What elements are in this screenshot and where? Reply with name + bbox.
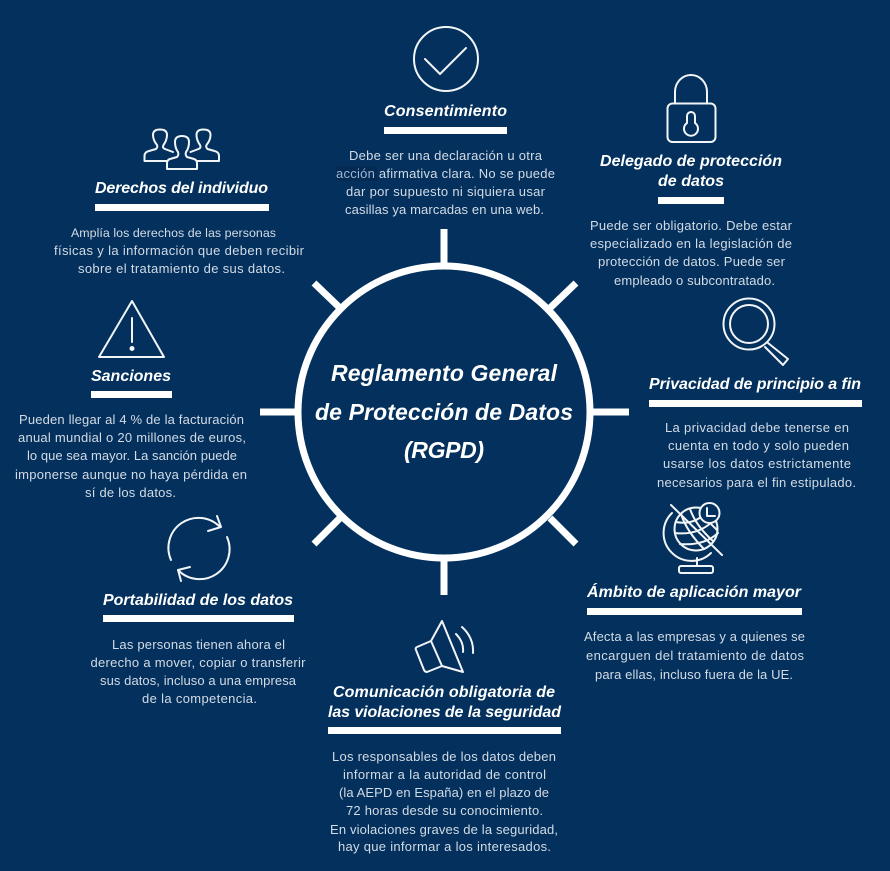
heading bar: consentimiento: [384, 127, 507, 134]
heading: consentimiento: Consentimiento: [384, 103, 507, 120]
text: privacidad: usarse los datos estrictamente: [663, 456, 851, 471]
heading: delegado: Delegado de protección: [600, 153, 782, 170]
heading bar: delegado: [658, 197, 724, 204]
text: sanciones: anual mundial o 20 millones de euros,: [18, 430, 246, 445]
text: delegado: empleado o subcontratado.: [614, 273, 775, 288]
icon: warning triangle: [99, 301, 164, 357]
heading: comunicación: las violaciones de la seguridad: [328, 704, 562, 721]
central title: de Protección de Datos: [315, 399, 573, 425]
text: comunicación: [330, 749, 558, 854]
text: privacidad: necesarios para el fin estipulado.: [657, 475, 856, 490]
icon: check circle: [414, 27, 478, 91]
text: sanciones: Pueden llegar al 4 % de la facturación: [19, 412, 244, 427]
text: ámbito: encarguen del tratamiento de datos: [586, 648, 804, 663]
text: portabilidad: de la competencia.: [142, 691, 257, 706]
text: consentimiento: [336, 148, 555, 217]
text: consentimiento: casillas ya marcadas en una web.: [345, 202, 544, 217]
heading: comunicación: [328, 684, 562, 721]
heading: privacidad: Privacidad de principio a fin: [649, 376, 861, 393]
heading: delegado: [600, 153, 782, 190]
heading: ámbito: Ámbito de aplicación mayor: [586, 582, 802, 601]
heading bar: comunicación: [328, 727, 561, 734]
panel: delegado de protección de datos: [590, 75, 793, 288]
text: privacidad: cuenta en todo y solo pueden: [668, 438, 849, 453]
heading bar: derechos: [95, 204, 269, 211]
panel: comunicación obligatoria: [328, 621, 562, 854]
heading: portabilidad: Portabilidad de los datos: [103, 592, 293, 609]
text: ámbito: [584, 629, 805, 682]
text: derechos: Amplía los derechos de las personas: [71, 226, 276, 240]
text: portabilidad: Las personas tienen ahora el: [112, 637, 285, 652]
panel: portabilidad de los datos: [90, 516, 306, 706]
panel: privacidad de principio a fin: [649, 298, 862, 490]
panel: consentimiento: [336, 27, 555, 217]
panel: ámbito de aplicación mayor: [584, 503, 805, 682]
central wheel with spokes: [260, 229, 629, 595]
text: delegado: protección de datos. Puede ser: [598, 254, 786, 269]
text: derechos: [54, 226, 305, 276]
text: comunicación: hay que informar a los interesados.: [338, 839, 551, 854]
text: consentimiento: acción afirmativa clara. No se puede: [336, 166, 555, 181]
text: privacidad: La privacidad debe tenerse en: [665, 420, 849, 435]
text: sanciones: sí de los datos.: [85, 485, 176, 500]
text: portabilidad: [90, 637, 306, 706]
text: comunicación: En violaciones graves de la seguridad,: [330, 822, 558, 837]
heading bar: ámbito: [587, 608, 802, 615]
heading bar: privacidad: [649, 400, 862, 407]
central title: Reglamento General: [331, 360, 558, 386]
heading bar: sanciones: [91, 391, 172, 398]
text: sanciones: lo que sea mayor. La sanción puede: [27, 448, 237, 463]
icon: circular arrows: [168, 516, 230, 581]
text: comunicación: (la AEPD en España) en el plazo de: [339, 785, 549, 800]
heading: derechos: Derechos del individuo: [95, 180, 268, 197]
text: derechos: sobre el tratamiento de sus datos.: [78, 261, 285, 276]
text: delegado: Puede ser obligatorio. Debe estar: [590, 218, 793, 233]
heading: comunicación: Comunicación obligatoria de: [333, 684, 555, 701]
panel: sanciones: [15, 301, 247, 500]
text: portabilidad: sus datos, incluso a una empresa: [100, 673, 297, 688]
icon: magnifying glass: [724, 298, 788, 365]
heading: delegado: de datos: [658, 173, 724, 190]
panel: derechos del individuo: [54, 130, 305, 276]
text: comunicación: informar a la autoridad de control: [343, 767, 546, 782]
icon: padlock: [668, 75, 716, 142]
heading: sanciones: Sanciones: [91, 368, 171, 385]
text: delegado: [590, 218, 793, 288]
text: consentimiento: dar por supuesto ni siquiera usar: [346, 184, 546, 199]
text: comunicación: Los responsables de los datos deben: [332, 749, 556, 764]
text: sanciones: [15, 412, 247, 500]
text: ámbito: Afecta a las empresas y a quienes se: [584, 629, 805, 644]
text: ámbito: para ellas, incluso fuera de la UE.: [595, 667, 793, 682]
text: portabilidad: derecho a mover, copiar o transferir: [90, 655, 306, 670]
text: derechos: físicas y la información que deben recibir: [54, 243, 305, 258]
text: comunicación: 72 horas desde su conocimiento.: [346, 803, 543, 818]
icon: group of people: [144, 130, 219, 169]
text: consentimiento: Debe ser una declaración u otra: [349, 148, 543, 163]
text: delegado: especializado en la legislación de: [590, 236, 792, 251]
heading bar: portabilidad: [103, 615, 294, 622]
central title: (RGPD): [404, 437, 484, 463]
text: privacidad: [657, 420, 856, 490]
icon: loudspeaker: [416, 621, 473, 672]
text: sanciones: imponerse aunque no haya pérdida en: [15, 467, 247, 482]
icon: globe with clock: [664, 503, 722, 573]
central title: [315, 360, 573, 463]
